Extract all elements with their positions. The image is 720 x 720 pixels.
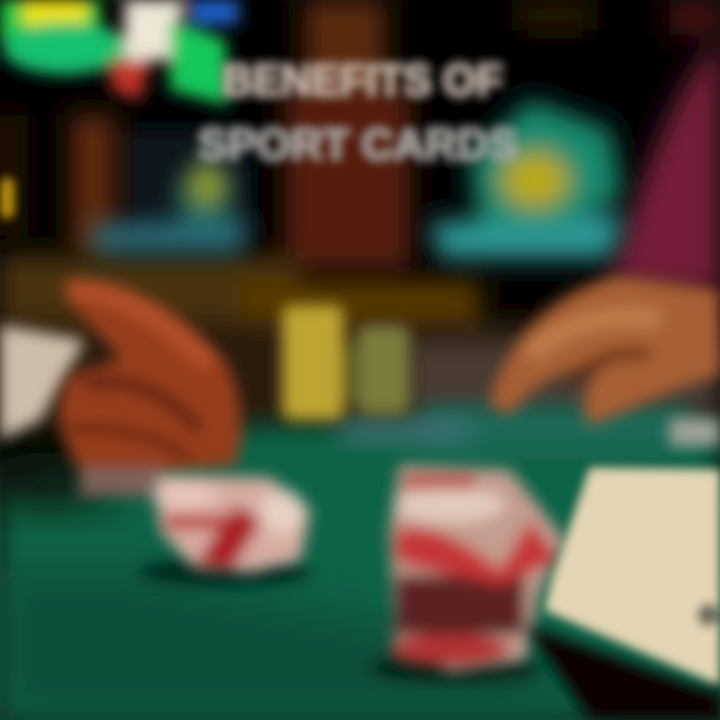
title: blurred headline [198,56,518,169]
table: green felt [0,405,720,720]
hand: right [490,275,720,425]
sleeve: maroon arm, top right [610,0,720,290]
icon: teal and gold emblem, left [90,150,250,252]
card: left white card [0,325,85,440]
card: large white card, bottom right [525,418,720,720]
hand: left [60,281,242,496]
chips: red and white stack, left [140,475,310,586]
title: blurred headline: SPORT CARDS [198,120,518,169]
title: blurred headline: BENEFITS OF [222,56,502,105]
background: gold table rail [0,255,720,430]
chips: red and white stack, right [370,465,565,682]
chips: yellow stacks [282,305,410,420]
icon: small gold mark, left edge [0,178,14,218]
icon: teal and gold emblem, right [430,100,625,258]
icon: colourful logo, top left [0,0,238,105]
background: brown wooden columns [0,0,590,270]
